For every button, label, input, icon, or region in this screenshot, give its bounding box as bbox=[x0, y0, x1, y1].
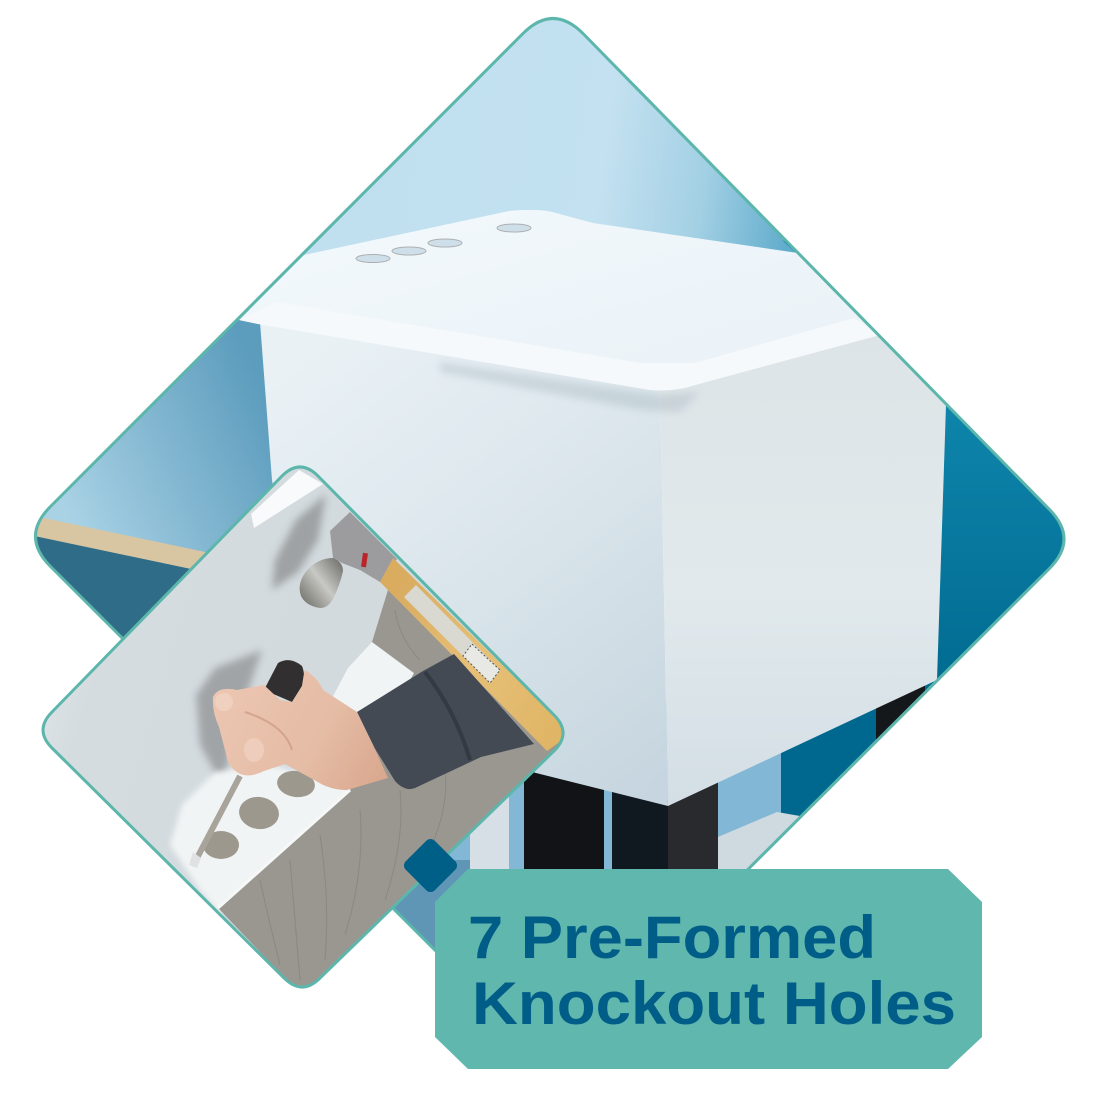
baseboard wood strip bbox=[37, 518, 206, 569]
sink left face bbox=[260, 322, 668, 806]
heading line 1: 7 Pre-Formed bbox=[468, 904, 876, 971]
leg: left bbox=[524, 772, 604, 869]
leg: rear right bbox=[876, 686, 925, 740]
panel: main sink photo in rounded diamond bbox=[34, 16, 1066, 952]
carpet bbox=[37, 536, 190, 637]
lower right deep blue wall bbox=[781, 708, 876, 816]
hammer shadow bbox=[272, 494, 326, 590]
sleeve rib bbox=[425, 672, 470, 760]
knockout hole 4 bbox=[497, 224, 531, 232]
knockout hole 1 bbox=[356, 254, 390, 262]
wall: left side bbox=[43, 310, 272, 552]
fingertips bbox=[244, 738, 264, 762]
lower left blue shade bbox=[394, 860, 470, 948]
knockout hole 3 bbox=[428, 239, 462, 247]
leg: center bbox=[612, 792, 668, 869]
callout: knockout holes banner bbox=[435, 869, 982, 1069]
wall: right dark teal bbox=[925, 406, 1062, 690]
wall: sliver behind top right rim bbox=[782, 240, 796, 252]
rim front band bbox=[239, 318, 877, 390]
sink wall bbox=[44, 468, 490, 954]
panel: inset photo of hammer and screwdriver bbox=[30, 455, 575, 1000]
thumb crease bbox=[245, 712, 292, 750]
thumb nail bbox=[215, 693, 233, 711]
floor grain bbox=[260, 610, 446, 980]
punched hole 1 bbox=[277, 770, 315, 798]
sleeve bbox=[357, 654, 534, 789]
sink right face bbox=[660, 330, 946, 806]
rim shadow bbox=[440, 362, 700, 412]
hammer head bbox=[300, 512, 397, 608]
sink rim bbox=[239, 210, 870, 363]
banner shape bbox=[435, 869, 982, 1069]
tray ledge with holes, soft upper edge bbox=[170, 765, 360, 915]
white baseboard left bbox=[470, 797, 509, 869]
punched hole 2 bbox=[239, 796, 279, 830]
handle label bbox=[404, 585, 500, 683]
wall: upper light blue bbox=[249, 20, 796, 310]
heading line 2: Knockout Holes bbox=[472, 970, 956, 1037]
hand bbox=[213, 670, 388, 790]
screwdriver handle bbox=[264, 660, 304, 702]
area under sink bbox=[449, 704, 781, 869]
tray upper white part bbox=[332, 642, 416, 715]
barcode bbox=[463, 644, 500, 683]
highlight at top of inset bbox=[251, 470, 323, 528]
inset diamond outline bbox=[43, 467, 563, 987]
leg: center side bbox=[668, 782, 718, 869]
wood floor bbox=[218, 590, 572, 996]
tray edge shadow bbox=[218, 790, 350, 908]
screwdriver shaft bbox=[189, 776, 240, 868]
hand shadow bbox=[196, 650, 262, 785]
hammer handle bbox=[380, 558, 572, 751]
knockout hole 2 bbox=[392, 247, 426, 255]
icon: small dark blue diamond bbox=[402, 837, 459, 894]
punched hole 3 bbox=[203, 831, 239, 859]
white baseboard right bbox=[718, 812, 800, 869]
